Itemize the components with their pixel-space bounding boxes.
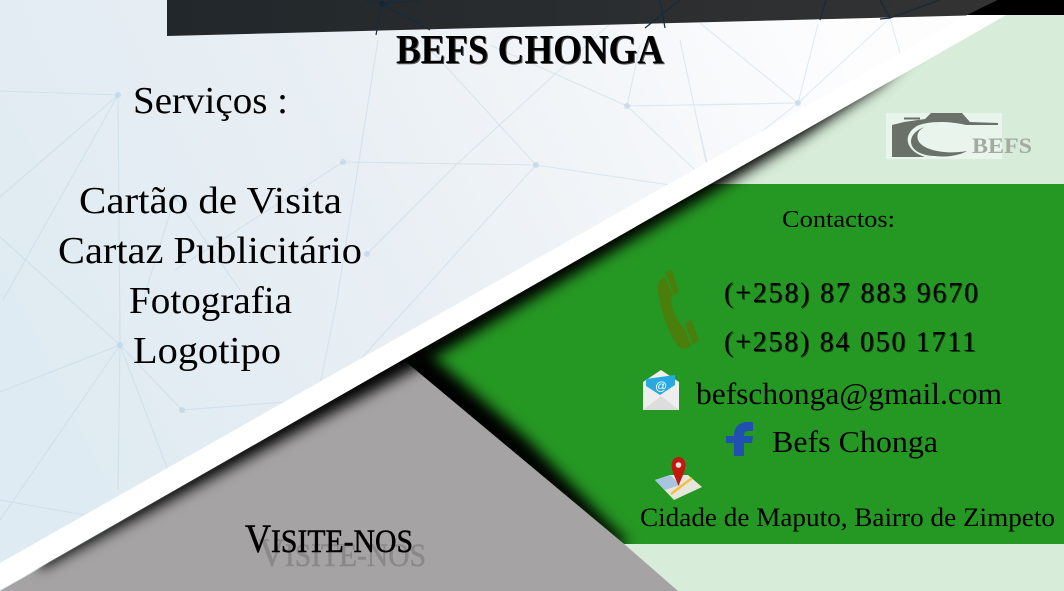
icon: facebook [726,422,753,456]
services list [58,80,362,372]
icon: email envelope [643,370,679,410]
icon: map pin [655,457,702,500]
facebook name: Befs Chonga [772,424,938,459]
service: photography: Fotografia [129,280,292,322]
logo: camera with BEFS: BEFS [972,133,1032,158]
shadow under white band [31,68,913,576]
phone number 1: (+258) 87 883 9670 [724,278,978,309]
visit-us heading: VISITE-NOS [245,516,413,561]
service: business card: Cartão de Visita [79,180,342,222]
icon: telephone [658,270,699,349]
logo: camera with BEFS [886,113,1032,159]
services heading: Serviços : [133,80,288,122]
network pattern over dark band [365,0,940,35]
contacts heading: Contactos: [782,207,895,233]
network nodes [115,92,801,413]
gray triangle panel [0,361,678,591]
phone number 2: (+258) 84 050 1711 [724,327,976,358]
visit-us shadow text: VISITE-NOS [259,530,426,575]
service: advertising poster: Cartaz Publicitário [58,230,362,272]
email address: befschonga@gmail.com [696,376,1002,411]
title: BEFS CHONGA [396,26,664,72]
icon: email envelope: @ [655,379,667,393]
green contact panel [405,184,1064,544]
address: Cidade de Maputo, Bairro de Zimpeto [640,503,1055,532]
service: logo: Logotipo [133,330,281,372]
shadow along gray edge [395,345,628,550]
dark top band [167,0,1064,36]
